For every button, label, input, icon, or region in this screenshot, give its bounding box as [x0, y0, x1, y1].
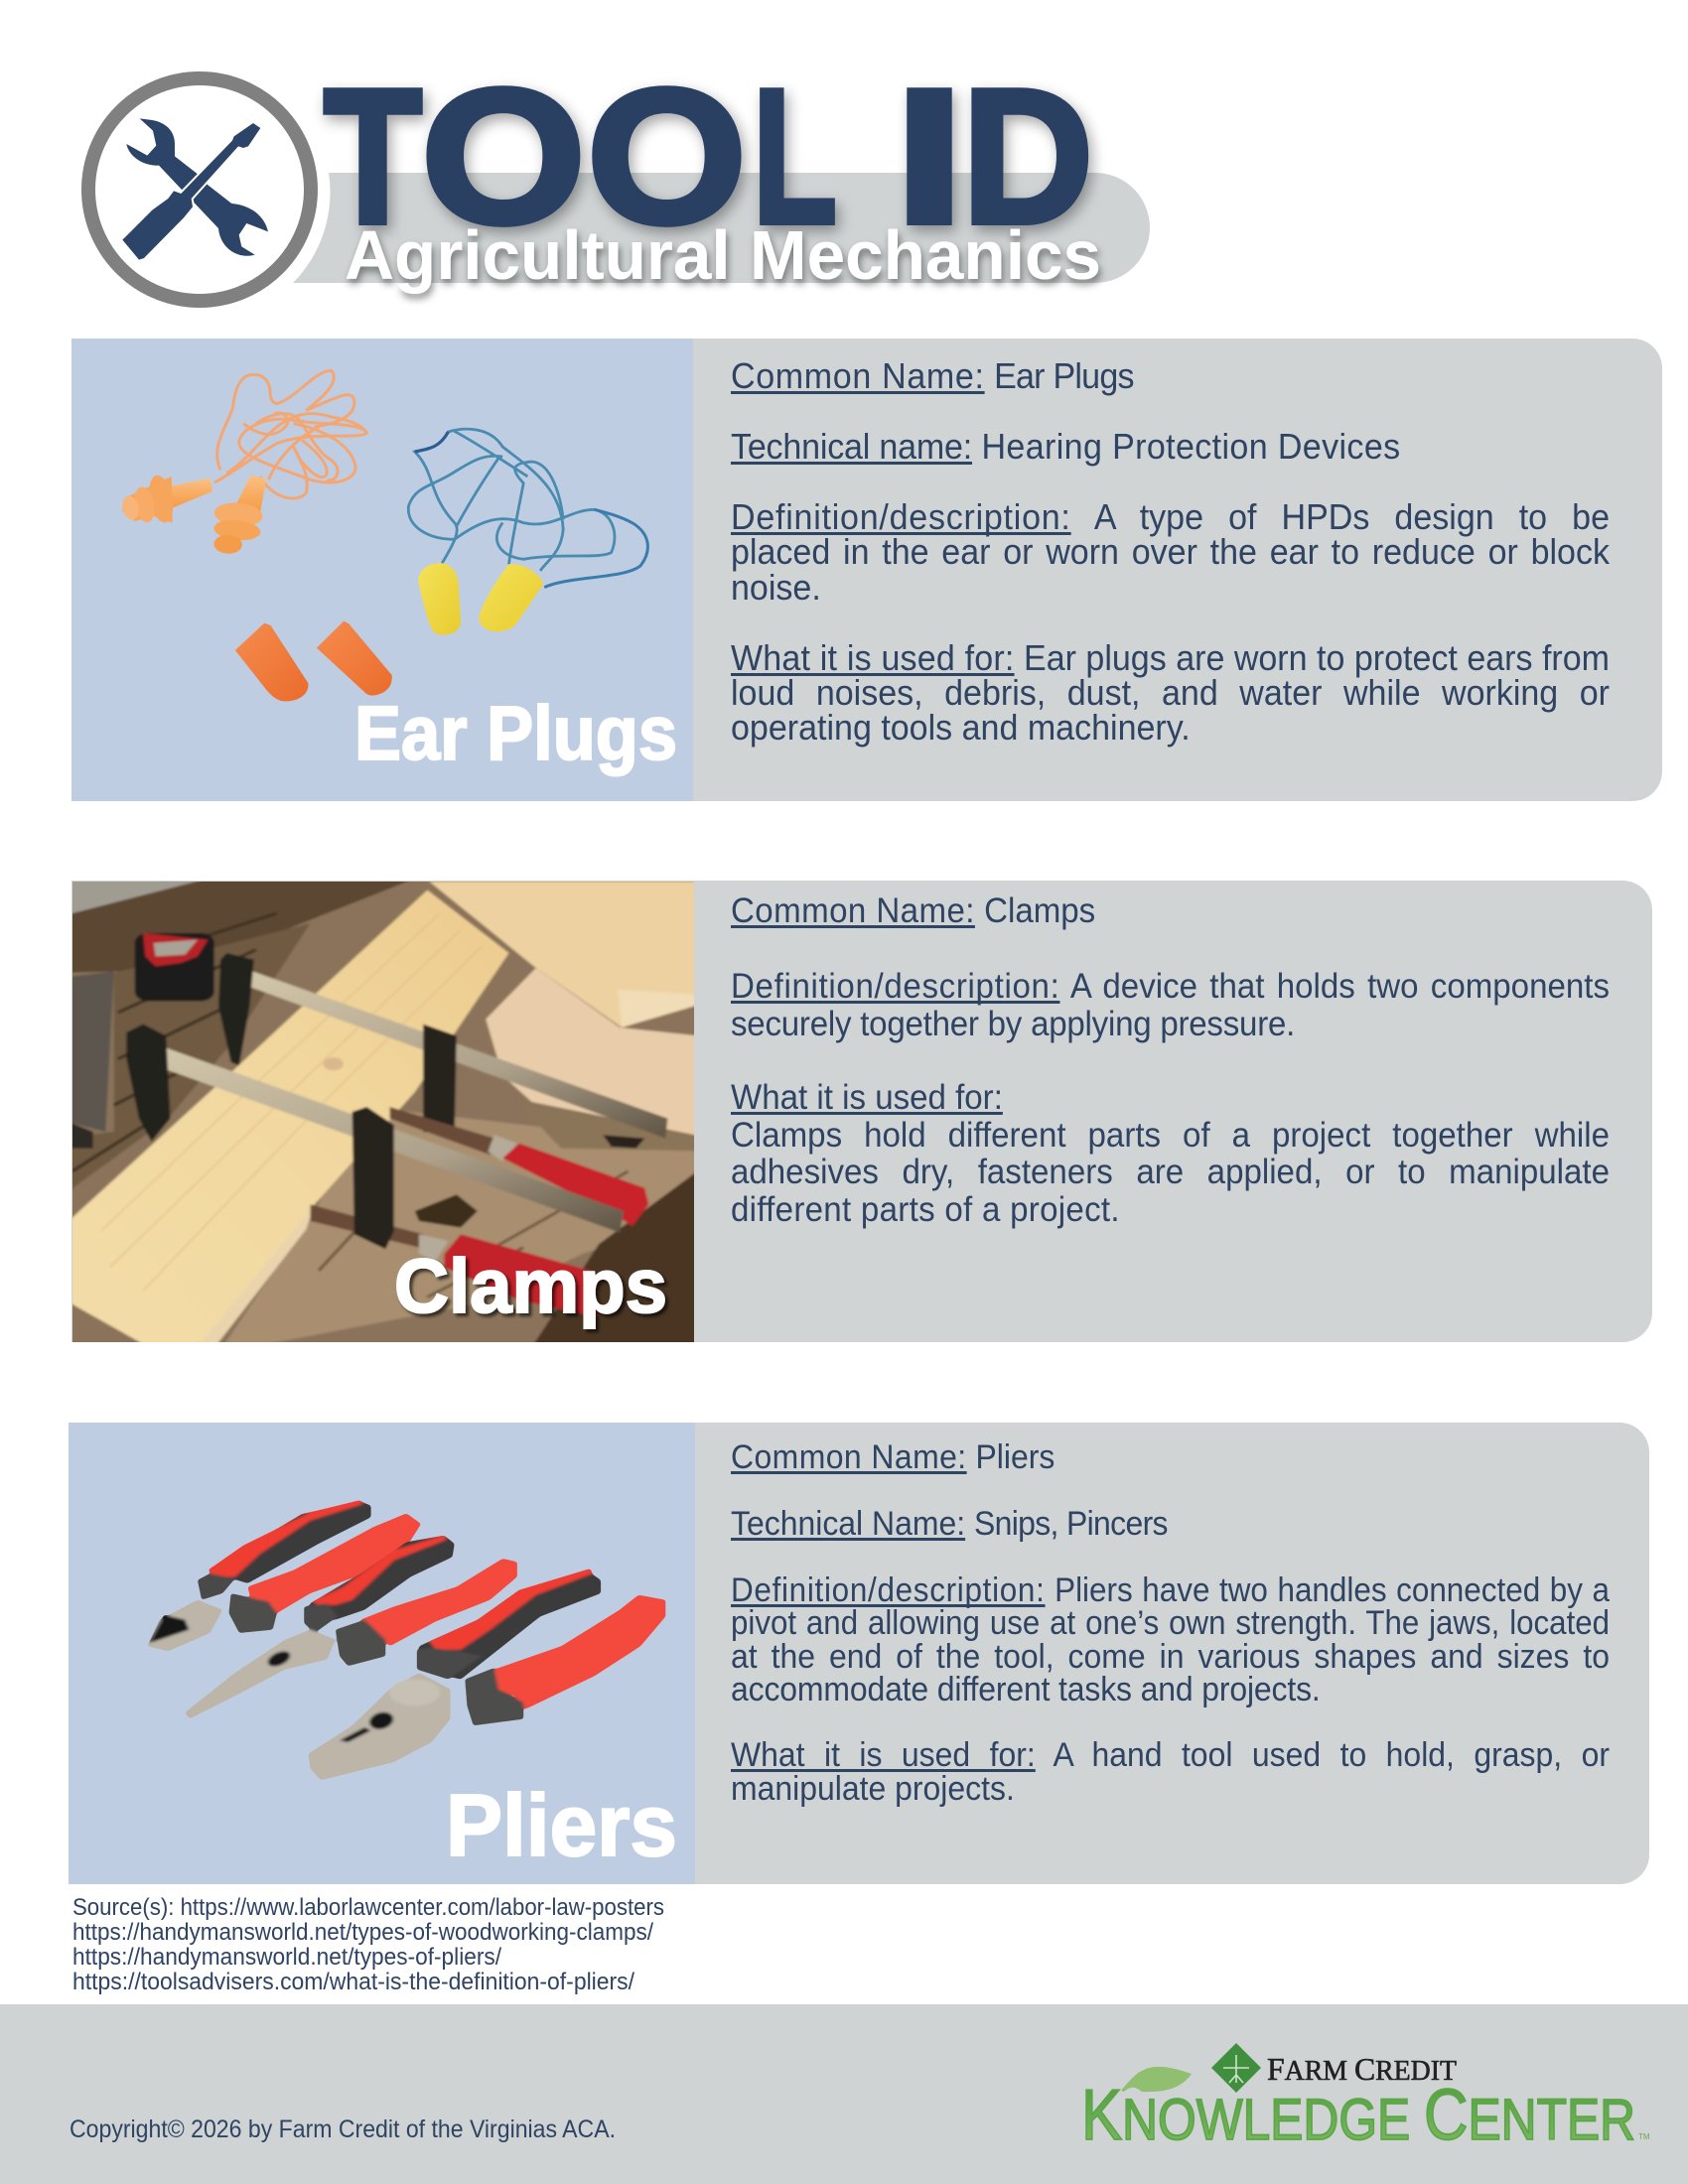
title: TOOL ID: O [587, 49, 747, 263]
description background [71, 881, 1652, 1342]
logo: Farm Credit Knowledge Center: TM [1638, 2132, 1650, 2141]
panel: pliers [69, 1423, 1649, 1884]
title: TOOL ID: T [324, 49, 422, 263]
text: what it is used for: operating tools and machinery. [731, 707, 1191, 748]
text: definition [731, 967, 1610, 1043]
needle nose pliers [185, 1536, 517, 1719]
small cutting pliers [147, 1500, 421, 1651]
label: Pliers: Pliers [446, 1776, 677, 1874]
label: Clamps: Clamps [394, 1244, 667, 1329]
title: TOOL ID [324, 49, 1093, 263]
subtitle: Agricultural Mechanics: Agricultural Mechanics [345, 216, 1101, 294]
text: definition: Definition/description: A type of HPDs design to be [731, 496, 1610, 537]
logo: Farm Credit Knowledge Center: FARM CREDIT [1267, 2051, 1457, 2087]
panel: clamps [71, 881, 1652, 1342]
tape measure and saw [60, 933, 214, 1149]
picture: clamps on workbench [72, 882, 694, 1342]
text: common name: Common Name: Clamps [731, 891, 1095, 930]
icon: wrench and screwdriver in ring [88, 78, 311, 301]
label: Ear Plugs: Ear Plugs [354, 691, 677, 776]
source list: https://handymansworld.net/types-of-woodworking-clamps/ [72, 1919, 653, 1946]
workbench and wood planks [60, 874, 728, 1353]
text: definition: securely together by applying pressure. [731, 1005, 1295, 1043]
text: what it is used for: adhesives dry, fasteners are applied, or to manipulate [731, 1153, 1610, 1191]
text: definition: noise. [731, 567, 821, 608]
header: Tool ID logo and title [81, 49, 1150, 308]
title: TOOL ID: L [753, 49, 837, 263]
source list: https://toolsadvisers.com/what-is-the-definition-of-pliers/ [72, 1969, 634, 1995]
text: definition [731, 496, 1610, 608]
description background [71, 339, 1662, 801]
back clamp [218, 953, 667, 1226]
gray title ribbon [293, 173, 1150, 283]
copyright: Copyright© 2026 by Farm Credit of the Virginias ACA. [70, 2116, 616, 2143]
text: technical name: Technical Name: Snips, Pincers [731, 1505, 1168, 1543]
source list: Source(s): https://www.laborlawcenter.com/labor-law-posters [72, 1894, 664, 1921]
text: technical name: Technical name: Hearing Protection Devices [731, 426, 1401, 467]
text: what it is used for [731, 1736, 1610, 1807]
logo: Farm Credit Knowledge Center: KNOWLEDGE CENTER [1081, 2076, 1635, 2155]
text: definition: Definition/description: A device that holds two components [731, 967, 1610, 1006]
text: definition: pivot and allowing use at one’s own strength. The jaws, located [731, 1604, 1610, 1642]
text: what it is used for: What it is used for: [731, 1078, 1003, 1117]
text: what it is used for: different parts of a project. [731, 1190, 1120, 1229]
text: what it is used for: manipulate projects. [731, 1769, 1015, 1807]
footer band [0, 2004, 1688, 2184]
text: definition [731, 1570, 1610, 1708]
title: TOOL ID: D [962, 49, 1093, 263]
description background [69, 1423, 1649, 1884]
title: TOOL ID: I [894, 49, 965, 263]
text: what it is used for: loud noises, debris, dust, and water while working or [731, 672, 1610, 713]
text: definition: Definition/description: Pliers have two handles connected by a [731, 1570, 1610, 1608]
source list [72, 1894, 664, 1995]
text: common name: Common Name: Pliers [731, 1438, 1055, 1476]
title: TOOL ID: O [421, 49, 586, 263]
text: what it is used for: Clamps hold different parts of a project together while [731, 1116, 1610, 1155]
text: common name: Common Name: Ear Plugs [731, 355, 1134, 395]
text: what it is used for [731, 637, 1610, 748]
orange corded plugs [121, 370, 366, 555]
panel: ear plugs [71, 339, 1662, 801]
picture: three pairs of pliers [69, 1423, 695, 1884]
orange foam plugs [235, 621, 392, 701]
blue corded plugs [408, 429, 647, 635]
combination pliers [308, 1569, 665, 1780]
text: what it is used for [731, 1078, 1610, 1229]
text: what it is used for: What it is used for: Ear plugs are worn to protect ears from [731, 637, 1610, 677]
text: what it is used for: What it is used for: A hand tool used to hold, grasp, or [731, 1736, 1610, 1774]
picture: ear plugs illustration [71, 339, 693, 801]
text: definition: placed in the ear or worn over the ear to reduce or block [731, 531, 1610, 572]
front clamp [126, 1024, 624, 1317]
logo: Farm Credit Knowledge Center [1081, 2043, 1650, 2155]
text: definition: accommodate different tasks and projects. [731, 1671, 1321, 1708]
source list: https://handymansworld.net/types-of-pliers/ [72, 1944, 501, 1971]
text: definition: at the end of the tool, come in various shapes and sizes to [731, 1638, 1610, 1676]
